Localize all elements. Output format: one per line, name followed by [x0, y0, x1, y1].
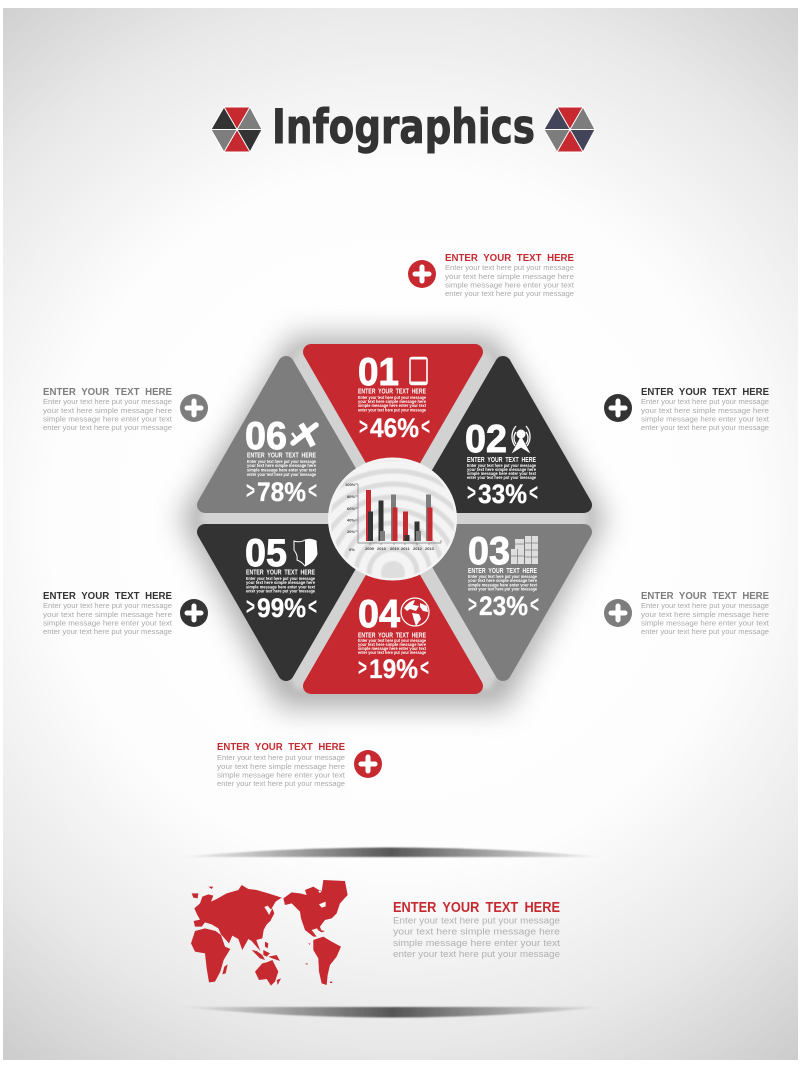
- callout: lower right: enter your text here put your message: [641, 627, 769, 636]
- panel 06: gray: ENTER YOUR TEXT HERE: [247, 450, 316, 460]
- callout: lower right: [604, 591, 770, 636]
- bar chart: 20%: [347, 529, 355, 534]
- callout: top: Enter your text here put your message: [445, 263, 574, 272]
- Australia: [255, 960, 278, 986]
- panel 03: gray: simple message here enter your text: [468, 582, 537, 588]
- panel 06: gray: enter your text here put your message: [247, 472, 316, 478]
- bar chart: 80%: [347, 494, 355, 499]
- icon: antenna tower: [512, 426, 530, 452]
- icon: buildings: [511, 536, 538, 564]
- panel 04: red: simple message here enter your text: [358, 646, 426, 652]
- Madagascar: [222, 964, 228, 974]
- callout: lower right: your text here simple message here: [641, 610, 769, 619]
- panel 04: red: enter your text here put your message: [358, 650, 426, 656]
- New Zealand: [277, 978, 281, 985]
- panel 05: dark: 05: [245, 532, 287, 575]
- callout: lower left: ENTER YOUR TEXT HERE: [43, 591, 172, 602]
- Southeast Asia islands: [252, 908, 280, 961]
- panel 05: dark: 99%: [257, 593, 306, 623]
- panel 04: red: <: [420, 654, 429, 682]
- panel 06: gray: >: [246, 478, 255, 504]
- icon: shield: [294, 539, 317, 566]
- callout: upper right: simple message here enter your text: [641, 414, 770, 424]
- panel 04: red: Enter your text here put your message: [358, 638, 426, 644]
- panel 01: red: 46%: [370, 413, 419, 443]
- panel 02: dark: <: [529, 480, 538, 506]
- panel 05: dark: Enter your text here put your message: [246, 576, 315, 582]
- panel 02: dark: Enter your text here put your message: [467, 463, 536, 469]
- panel 04: red: [311, 544, 475, 686]
- panel 03: gray: >: [468, 592, 477, 618]
- bar chart: 40%: [347, 518, 355, 522]
- panel 05: dark: >: [246, 594, 255, 620]
- panel 04: red: 19%: [369, 654, 418, 684]
- panel 02: dark: ENTER YOUR TEXT HERE: [467, 455, 536, 464]
- panel 02: dark: >: [467, 480, 476, 506]
- hexagon base: [198, 350, 590, 690]
- center disc: [328, 458, 457, 580]
- callout: upper right: [604, 387, 770, 432]
- callout: lower left: simple message here enter your text: [43, 618, 173, 628]
- panel 03: gray: enter your text here put your message: [468, 586, 537, 592]
- shadow band: top: [178, 848, 604, 857]
- bar chart: 60%: [347, 506, 355, 511]
- panel 06: gray: <: [308, 478, 317, 504]
- South America: [313, 937, 341, 985]
- panel 01: red: <: [421, 414, 430, 440]
- bar chart: 2011: [401, 546, 410, 551]
- callout: bottom: enter your text here put your message: [217, 779, 345, 788]
- callout: upper right: your text here simple message here: [641, 406, 769, 415]
- callout: bottom: your text here simple message here: [217, 762, 345, 771]
- callout: top: simple message here enter your text: [445, 280, 575, 290]
- panel 02: dark: 33%: [478, 479, 527, 509]
- panel 05: dark: simple message here enter your text: [246, 584, 315, 590]
- bar chart: 2009: [365, 546, 375, 551]
- North America and Greenland: [283, 880, 348, 937]
- panel 01: red: simple message here enter your text: [358, 403, 426, 409]
- panel 01: red: Enter your text here put your message: [358, 395, 426, 401]
- British Isles and Iceland: [192, 887, 213, 898]
- bar chart: 2013: [425, 546, 435, 551]
- bar chart: 100%: [345, 482, 356, 487]
- panel 06: gray: Enter your text here put your message: [247, 459, 316, 465]
- panel 01: red: >: [359, 414, 368, 440]
- callout: lower right: simple message here enter your text: [641, 618, 770, 628]
- bar chart: 2012: [413, 546, 423, 551]
- panel 05: dark: enter your text here put your message: [246, 589, 315, 595]
- panel 02: dark: 02: [465, 418, 507, 461]
- bar chart: 2010: [390, 546, 400, 551]
- map text: simple message here enter your text: [393, 938, 560, 949]
- callout: lower left: Enter your text here put your message: [43, 601, 172, 610]
- callout: upper right: enter your text here put your message: [641, 423, 769, 432]
- hexagon shadow: [180, 336, 606, 708]
- panel 03: gray: [421, 530, 584, 673]
- callout: upper left: [43, 387, 208, 432]
- callout: upper left: ENTER YOUR TEXT HERE: [43, 387, 172, 398]
- heading text: Infographics: [272, 100, 535, 155]
- callout: upper right: Enter your text here put your message: [641, 397, 769, 406]
- callout: top: your text here simple message here: [445, 272, 574, 281]
- panel 06: gray: 06: [245, 415, 287, 458]
- panel 05: dark: your text here simple message here: [246, 580, 315, 586]
- panel 05: dark: [205, 532, 368, 673]
- map text: enter your text here put your message: [393, 949, 560, 960]
- panel 03: gray: 03: [468, 530, 510, 573]
- panel 05: dark: <: [308, 594, 317, 620]
- panel 02: dark: [421, 364, 584, 509]
- bar chart: [345, 482, 441, 552]
- bar chart: 0%: [349, 547, 355, 552]
- callout: lower left: [43, 591, 208, 636]
- map text: ENTER YOUR TEXT HERE: [393, 900, 560, 916]
- callout: bottom: Enter your text here put your message: [217, 753, 345, 762]
- callout: upper right: ENTER YOUR TEXT HERE: [641, 387, 769, 398]
- panel 01: red: ENTER YOUR TEXT HERE: [358, 386, 426, 396]
- panel 03: gray: 23%: [479, 591, 528, 621]
- panel 01: red: enter your text here put your message: [358, 408, 426, 414]
- panel 06: gray: 78%: [257, 477, 306, 507]
- panel 01: red: your text here simple message here: [358, 399, 426, 405]
- callout: upper left: Enter your text here put your message: [43, 397, 172, 406]
- map text: your text here simple message here: [393, 926, 560, 938]
- callout: lower right: ENTER YOUR TEXT HERE: [641, 591, 769, 602]
- callout: lower left: your text here simple message here: [43, 610, 172, 619]
- icon: phone: [410, 358, 427, 384]
- panel 03: gray: Enter your text here put your message: [468, 574, 537, 580]
- panel 03: gray: <: [530, 592, 539, 618]
- callout: upper left: your text here simple message here: [43, 406, 172, 415]
- Caribbean: [317, 929, 325, 932]
- panel 03: gray: your text here simple message here: [468, 578, 537, 584]
- icon: left hexagon: [211, 107, 262, 152]
- callout: lower left: enter your text here put your message: [43, 627, 172, 636]
- callout: top: ENTER YOUR TEXT HERE: [445, 253, 574, 264]
- map text: Enter your text here put your message: [393, 916, 560, 926]
- icon: globe: [401, 598, 429, 626]
- callout: bottom: ENTER YOUR TEXT HERE: [217, 742, 345, 753]
- panel 02: dark: your text here simple message here: [467, 467, 536, 473]
- Africa: [191, 928, 230, 982]
- callout: bottom: [217, 742, 382, 788]
- bar chart: 2010: [377, 546, 387, 551]
- callout: top: [408, 253, 575, 298]
- panel 03: gray: ENTER YOUR TEXT HERE: [468, 566, 537, 575]
- icon: right hexagon: [544, 107, 595, 152]
- map text: [393, 900, 560, 960]
- Eurasia: [194, 885, 282, 951]
- panel 04: red: your text here simple message here: [358, 642, 426, 648]
- panel 04: red: ENTER YOUR TEXT HERE: [358, 630, 426, 640]
- callout: lower right: Enter your text here put your message: [641, 601, 769, 610]
- panel 05: dark: ENTER YOUR TEXT HERE: [246, 568, 315, 576]
- panel 06: gray: your text here simple message here: [247, 463, 316, 469]
- icon: plane: [292, 424, 316, 446]
- panel 06: gray: [205, 364, 368, 507]
- callout: bottom: simple message here enter your text: [217, 770, 346, 780]
- world map: [191, 880, 348, 986]
- panel 01: red: [311, 351, 475, 494]
- panel 02: dark: enter your text here put your message: [467, 475, 536, 481]
- panel 02: dark: simple message here enter your text: [467, 471, 536, 477]
- callout: top: enter your text here put your message: [445, 289, 574, 298]
- panel 06: gray: simple message here enter your text: [247, 467, 316, 473]
- panel 04: red: >: [358, 654, 367, 682]
- callout: upper left: enter your text here put your message: [43, 423, 172, 432]
- title: [211, 100, 595, 155]
- panel 01: red: 01: [358, 351, 399, 394]
- callout: upper left: simple message here enter your text: [43, 414, 173, 424]
- shadow band: bottom: [180, 1007, 606, 1018]
- panel 04: red: 04: [358, 593, 400, 636]
